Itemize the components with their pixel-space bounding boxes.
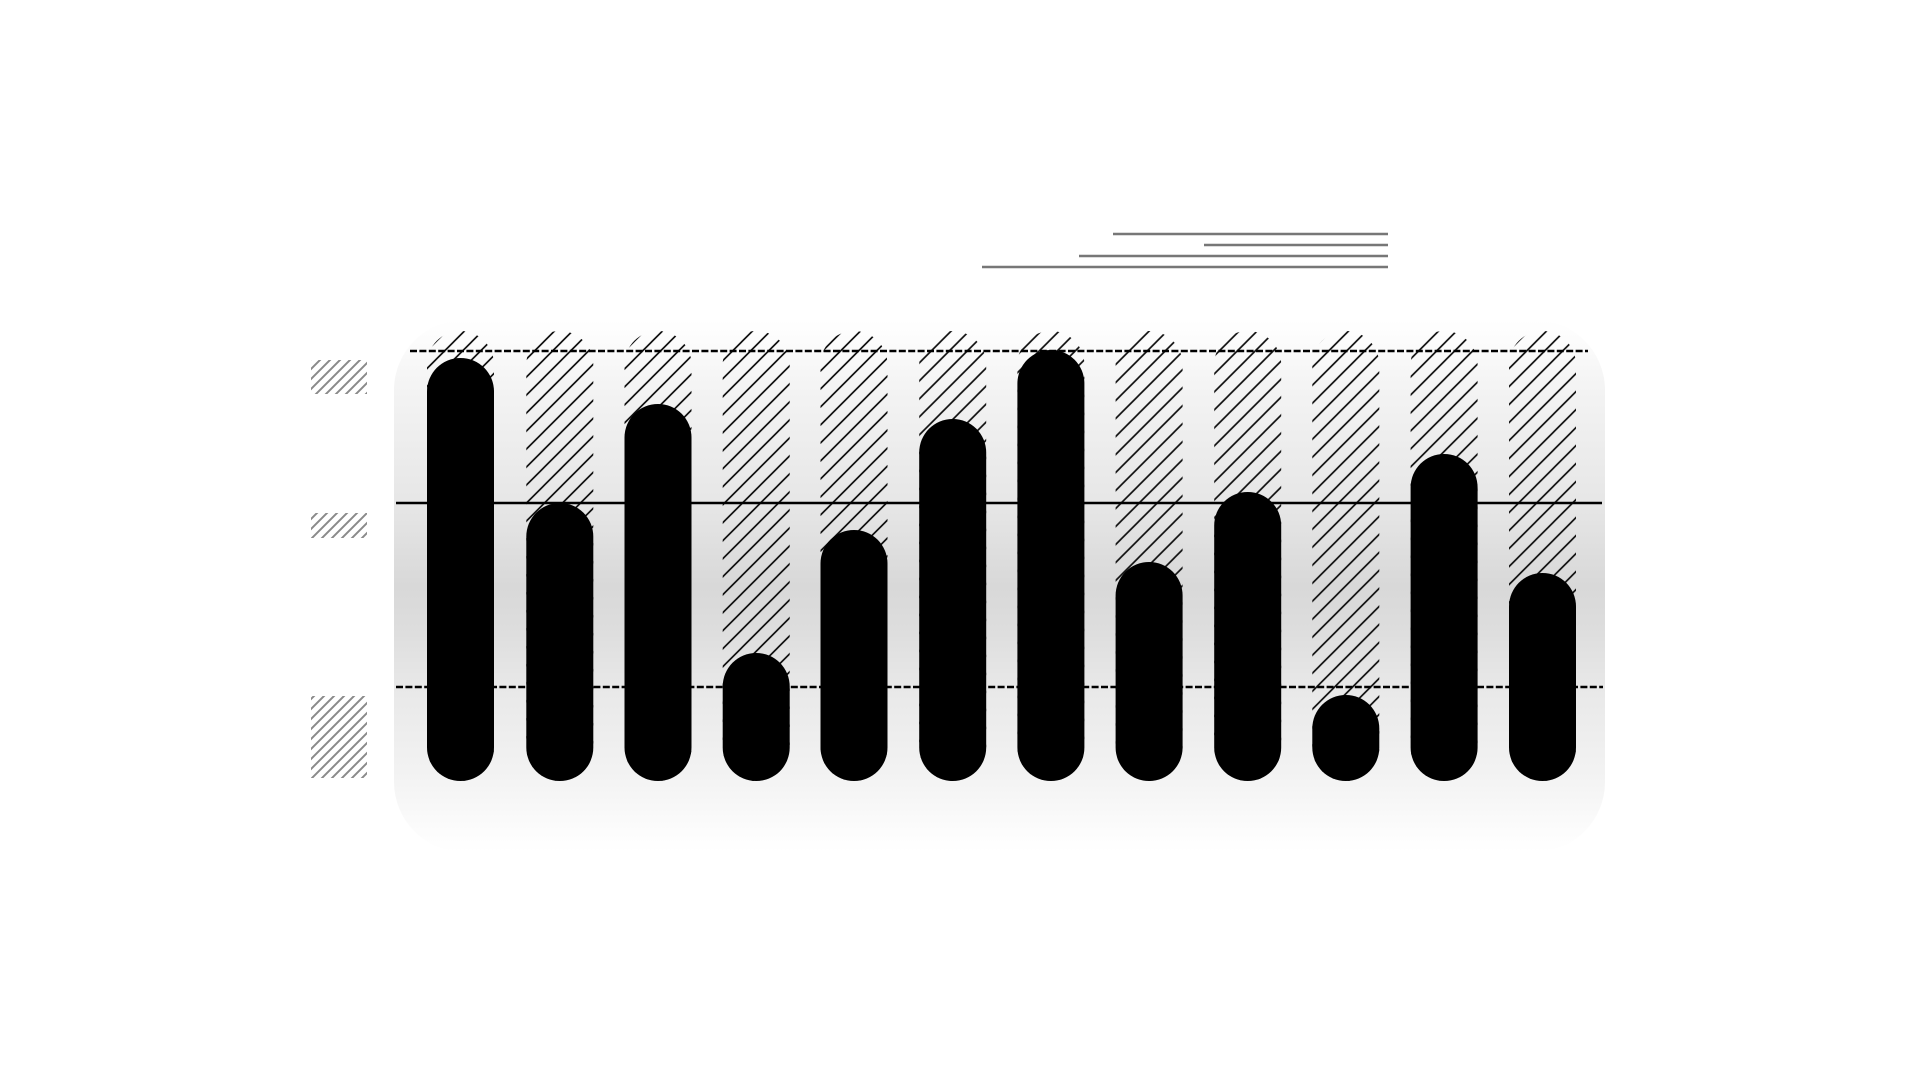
panel: chart background xyxy=(394,320,1605,852)
top right header lines xyxy=(982,234,1388,267)
hatched bar tracks xyxy=(427,331,1576,781)
bars xyxy=(427,350,1576,781)
legend swatches xyxy=(311,360,367,778)
solid reference line xyxy=(396,502,1602,504)
lower dashed reference line xyxy=(396,686,1603,688)
upper dashed reference line xyxy=(410,350,1588,352)
